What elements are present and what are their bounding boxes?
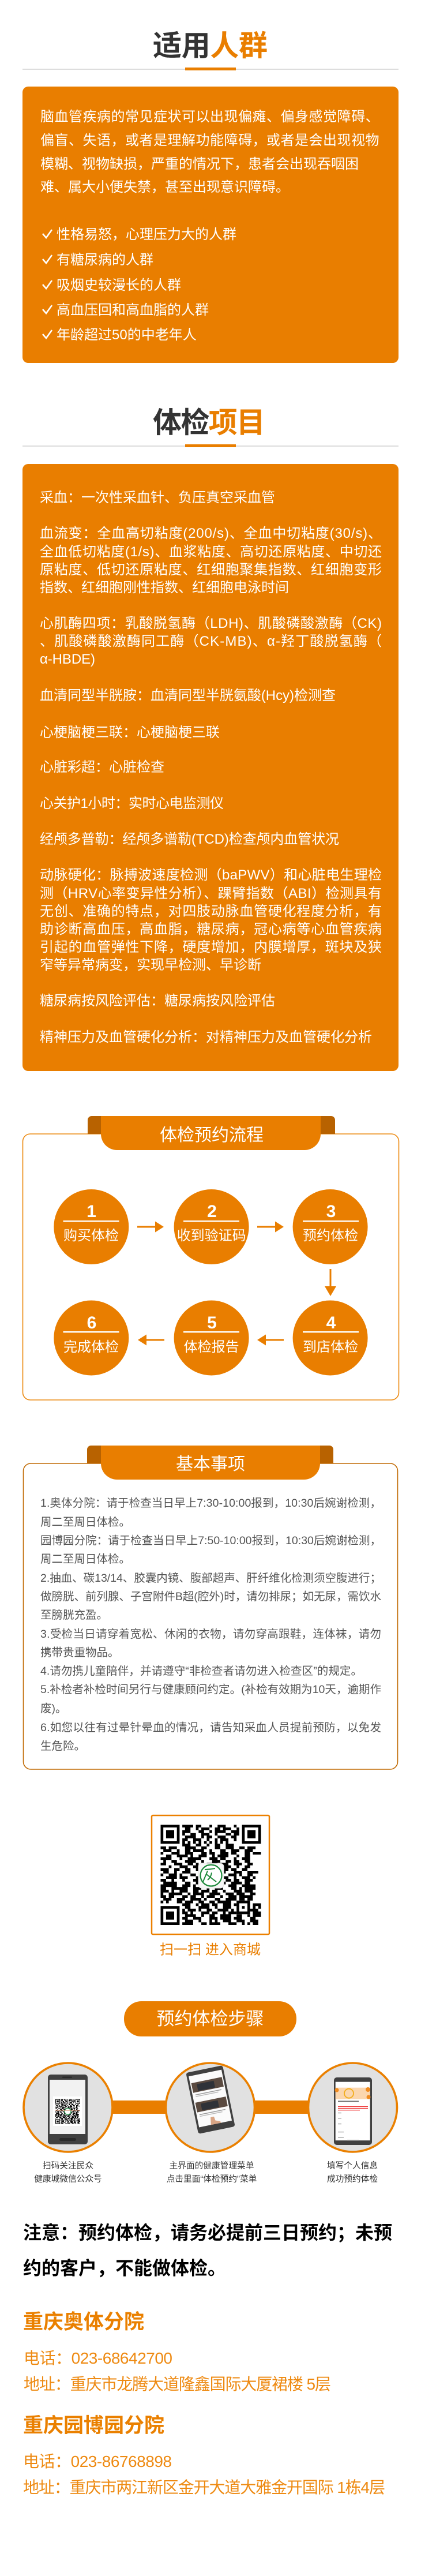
text block: exam item list: 原粘度、低切还原粘度、红细胞聚集指数、红细胞变形 [40, 562, 382, 578]
step circle 2: menu phone [166, 2063, 255, 2152]
text block: symptoms: 难、属大小便失禁，甚至出现意识障碍。 [40, 179, 290, 195]
captions: booking steps: 点击里面“体检预约”菜单 [167, 2174, 257, 2184]
arrow: step 2 to 3 [257, 1221, 284, 1233]
panel: exam items [22, 464, 399, 1071]
step 2: 2 [207, 1202, 217, 1221]
tab: basic notes [87, 1446, 333, 1480]
arrow: step 3 to 4 [325, 1269, 336, 1296]
text block: exam item list: 采血：一次性采血针、负压真空采血管 [40, 490, 275, 506]
step 6: 6 [87, 1313, 96, 1332]
step 4: 到店体检 [303, 1339, 358, 1355]
text block: notes list: 携带贵重物品。 [40, 1646, 119, 1659]
captions: booking steps: 扫码关注民众 [43, 2161, 93, 2171]
button: booking steps [124, 2001, 296, 2036]
text block: notes list: 至膀胱充盈。 [40, 1609, 108, 1622]
tab: basic notes: 基本事项 [176, 1455, 245, 1474]
arrow: step 4 to 5 [257, 1334, 284, 1346]
captions: booking steps [34, 2161, 378, 2184]
branch: Yuanboyuan: 重庆园博园分院 [23, 2414, 164, 2437]
tab: booking flow [88, 1116, 335, 1150]
text block: exam item list: 测（HRV心率变异性分析）、踝臂指数（ABI）检测具有 [40, 886, 382, 901]
text block: notes list: 4.请勿携儿童陪伴，并请遵守“非检查者请勿进入检查区”的规定。 [40, 1665, 362, 1678]
text block: notes list [40, 1497, 381, 1753]
text block: exam item list: 全血低切粘度(1/s)、血浆粘度、高切还原粘度、中切还 [40, 544, 382, 560]
text block: notes list: 周二至周日体检。 [40, 1516, 130, 1529]
branch: Aoti: 地址：重庆市龙腾大道隆鑫国际大厦裙楼 5层 [24, 2375, 331, 2393]
step 5 [174, 1301, 249, 1376]
text block: exam item list: 精神压力及血管硬化分析：对精神压力及血管硬化分析 [40, 1029, 372, 1045]
step 2: 收到验证码 [177, 1228, 246, 1244]
text block: exam item list: 心肌酶四项：乳酸脱氢酶（LDH)、肌酸磷酸激酶（CK) [40, 616, 382, 631]
checklist: at-risk groups: 高血压回和高血脂的人群 [57, 302, 209, 318]
checklist: at-risk groups: 吸烟史较漫长的人群 [57, 278, 181, 293]
step circle 3: form phone [308, 2063, 397, 2152]
heading rule [22, 444, 399, 447]
text block: notes list: 废)。 [40, 1702, 67, 1715]
tab: booking flow: 体检预约流程 [160, 1126, 264, 1145]
step 3: 预约体检 [303, 1228, 358, 1244]
captions: booking steps: 健康城微信公众号 [34, 2174, 102, 2184]
heading: suitable people: 适用人群 [153, 30, 268, 62]
text block: notes list: 6.如您以往有过晕针晕血的情况，请告知采血人员提前预防，以免发 [40, 1721, 381, 1734]
step 3: 3 [326, 1202, 336, 1221]
connector bars [110, 2101, 312, 2114]
step 1: 购买体检 [63, 1228, 119, 1244]
step 6 [54, 1301, 129, 1376]
text block: notes list: 做膀胱、前列腺、子宫附件B超(腔外)时，请勿排尿；如无尿，需饮水 [40, 1590, 381, 1603]
checklist: at-risk groups: 年龄超过50的中老年人 [57, 327, 197, 343]
branch: Yuanboyuan: 电话：023-86768898 [23, 2453, 172, 2470]
branch: Yuanboyuan [23, 2414, 385, 2496]
text block: exam item list: 动脉硬化：脉搏波速度检测（baPWV）和心脏电生理检 [40, 867, 382, 883]
QR caption: 扫一扫 进入商城 [160, 1942, 261, 1958]
text block: symptoms [40, 109, 379, 195]
step circle 1: scan QR phone [24, 2063, 112, 2152]
QR code card [152, 1815, 269, 1934]
captions: booking steps: 填写个人信息 [327, 2161, 378, 2171]
text block: notes list: 5.补检者补检时间另行与健康顾问约定。(补检有效期为10天，逾期作 [40, 1683, 381, 1696]
branch: Yuanboyuan: 地址：重庆市两江新区金开大道大雅金开国际 1栋4层 [23, 2478, 385, 2496]
captions: booking steps: 主界面的健康管理菜单 [170, 2161, 254, 2171]
text block: exam item list: 心关护1小时：实时心电监测仪 [40, 796, 224, 811]
button: booking steps: 预约体检步骤 [157, 2009, 264, 2029]
icon: green logo [198, 1863, 224, 1888]
text block: symptoms: 脑血管疾病的常见症状可以出现偏瘫、偏身感觉障碍、 [40, 109, 379, 125]
step 5: 5 [207, 1313, 217, 1332]
text block: exam item list: α-HBDE) [40, 652, 95, 667]
branch: Aoti [23, 2311, 331, 2393]
notice: 注意：预约体检，请务必提前三日预约；未预 [23, 2222, 392, 2243]
text block: exam item list: 无创、准确的特点，对四肢动脉血管硬化程度分析，有 [40, 904, 382, 919]
arrow: step 5 to 6 [138, 1334, 164, 1346]
text block: exam item list: 引起的血管弹性下降，硬度增加，内膜增厚，斑块及狭 [40, 939, 382, 955]
panel: booking flow [23, 1116, 399, 1400]
text block: exam item list: 窄等异常病变，实现早检测、早诊断 [40, 957, 261, 973]
text block: exam item list: 糖尿病按风险评估：糖尿病按风险评估 [40, 993, 275, 1009]
text block: symptoms: 模糊、视物缺损，严重的情况下，患者会出现吞咽困 [40, 156, 359, 172]
icon: tilted phone [186, 2065, 235, 2134]
text block: notes list: 1.奥体分院：请于检查当日早上7:30-10:00报到，10:30后婉谢检测， [40, 1497, 381, 1510]
text block: notes list: 生危险。 [40, 1740, 85, 1753]
checklist: at-risk groups [43, 227, 236, 343]
heading rule [22, 68, 399, 70]
text block: notes list: 园博园分院：请于检查当日早上7:50-10:00报到，10:30后婉谢检测， [40, 1534, 381, 1547]
text block: exam item list [40, 490, 382, 1045]
checklist: at-risk groups: 性格易怒，心理压力大的人群 [57, 227, 236, 242]
step 6: 完成体检 [63, 1339, 119, 1355]
step 2 [174, 1189, 249, 1264]
text block: symptoms: 偏盲、失语，或者是理解功能障碍，或者是会出现视物 [40, 133, 379, 148]
icon: phone with form [334, 2077, 372, 2145]
panel: suitable people [22, 87, 399, 363]
text block: exam item list: 经颅多普勒：经颅多谱勒(TCD)检查颅内血管状况 [40, 832, 339, 847]
panel: basic notes [23, 1446, 398, 1769]
text block: exam item list: 助诊断高血压，高血脂，糖尿病，冠心病等心血管疾病 [40, 922, 382, 937]
text block: exam item list: 指数、红细胞刚性指数、红细胞电泳时间 [40, 580, 289, 596]
icon: phone with QR [48, 2075, 88, 2144]
step 3 [293, 1189, 368, 1264]
branch: Aoti: 电话：023-68642700 [24, 2349, 172, 2367]
text block: exam item list: 、肌酸磷酸激酶同工酶（CK-MB)、α-羟丁酸脱氢酶（ [40, 634, 382, 649]
text block: exam item list: 血清同型半胱胺：血清同型半胱氨酸(Hcy)检测查 [40, 688, 336, 703]
arrow: step 1 to 2 [137, 1221, 164, 1233]
step 5: 体检报告 [184, 1339, 239, 1355]
text block: notes list: 2.抽血、碳13/14、胶囊内镜、腹部超声、肝纤维化检测须空腹进行； [40, 1572, 381, 1585]
heading: exam items: 体检项目 [153, 406, 265, 439]
branch: Aoti: 重庆奥体分院 [23, 2311, 144, 2334]
section: exam items [22, 406, 399, 1071]
step 4: 4 [326, 1313, 336, 1332]
text block: exam item list: 心梗脑梗三联：心梗脑梗三联 [40, 725, 220, 740]
step 1: 1 [87, 1202, 96, 1221]
checklist: at-risk groups: 有糖尿病的人群 [57, 252, 153, 268]
text block: exam item list: 血流变：全血高切粘度(200/s)、全血中切粘度(30/s)、 [40, 526, 382, 541]
notice [23, 2222, 392, 2278]
captions: booking steps: 成功预约体检 [327, 2174, 378, 2184]
text block: notes list: 3.受检当日请穿着宽松、休闲的衣物，请勿穿高跟鞋，连体袜，请勿 [40, 1628, 381, 1641]
notice: 约的客户，不能做体检。 [23, 2257, 226, 2278]
text block: exam item list: 心脏彩超：心脏检查 [40, 759, 164, 775]
step 1 [54, 1189, 129, 1264]
booking steps diagram [24, 2063, 397, 2152]
section: suitable people [22, 30, 399, 363]
step 4 [293, 1301, 368, 1376]
text block: notes list: 周二至周日体检。 [40, 1553, 130, 1566]
